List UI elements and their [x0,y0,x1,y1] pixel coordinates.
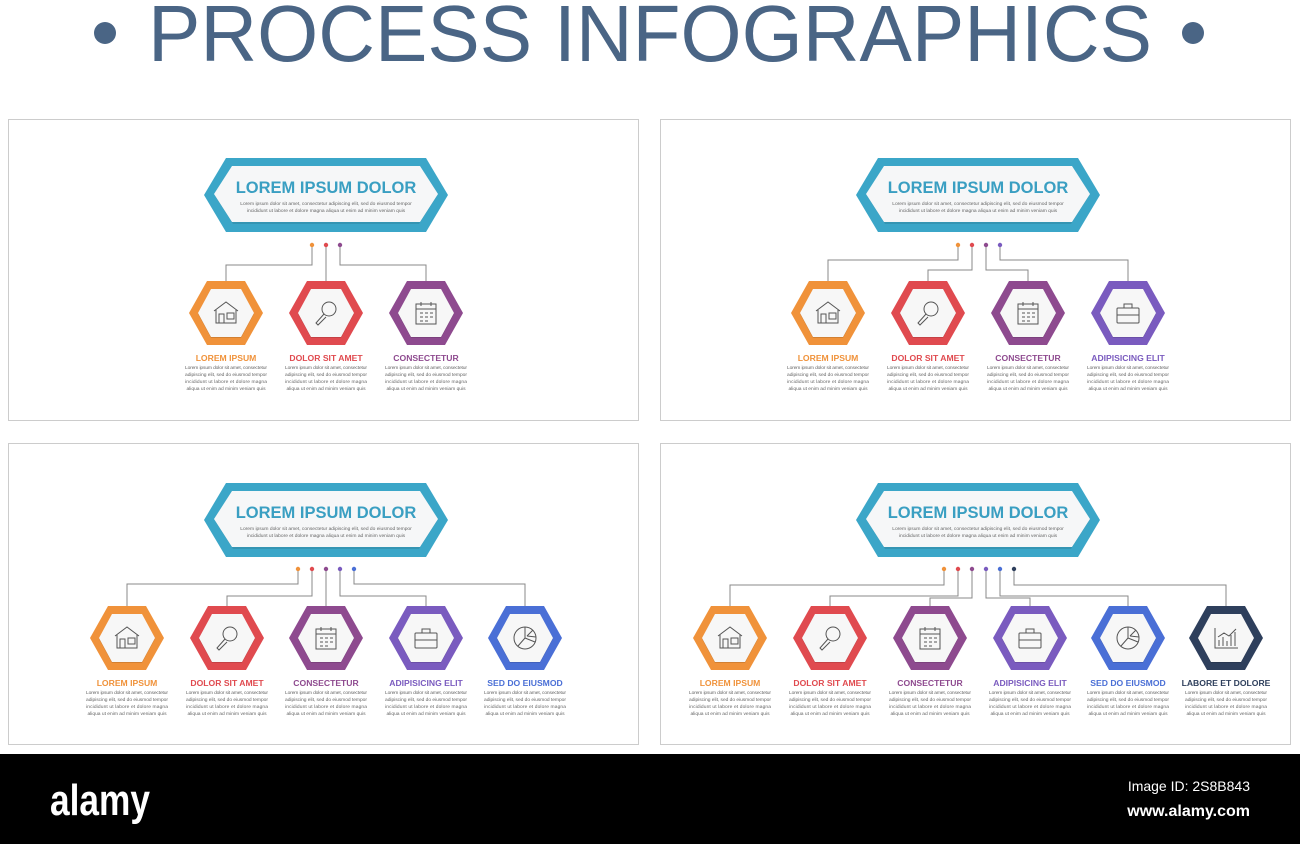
item: dolor sit amet: DOLOR SIT AMET [891,353,965,363]
item: adipisicing elit: Lorem ipsum dolor sit amet, consectetur [989,690,1071,696]
item: consectetur: aliqua ut enim ad minim veniam quis [386,386,466,392]
item: lorem ipsum: LOREM IPSUM [196,353,256,363]
image id: Image ID: 2S8B843 [1128,778,1250,794]
item: consectetur: incididunt ut labore et dolore magna [285,704,367,710]
item: dolor sit amet [789,606,871,717]
item: lorem ipsum: aliqua ut enim ad minim veniam quis [690,711,770,717]
item: dolor sit amet: incididunt ut labore et dolore magna [789,704,871,710]
item: dolor sit amet: aliqua ut enim ad minim veniam quis [790,711,870,717]
item: lorem ipsum: incididunt ut labore et dolore magna [86,704,168,710]
item: lorem ipsum: LOREM IPSUM [97,678,157,688]
item: consectetur: adipiscing elit, sed do eiusmod tempor [285,697,367,703]
header [856,483,1100,557]
item: consectetur: adipiscing elit, sed do eiusmod tempor [889,697,971,703]
item: sed do eiusmod: adipiscing elit, sed do eiusmod tempor [1087,697,1169,703]
item: lorem ipsum: Lorem ipsum dolor sit amet, consectetur [86,690,168,696]
header: LOREM IPSUM DOLOR [888,504,1068,522]
connectors [730,567,1226,606]
item: consectetur: CONSECTETUR [393,353,459,363]
connectors [828,243,1128,281]
item: consectetur: aliqua ut enim ad minim veniam quis [988,386,1068,392]
item: lorem ipsum: adipiscing elit, sed do eiusmod tempor [689,697,771,703]
item: lorem ipsum: adipiscing elit, sed do eiusmod tempor [86,697,168,703]
item: adipisicing elit: incididunt ut labore et dolore magna [989,704,1071,710]
item: sed do eiusmod: adipiscing elit, sed do eiusmod tempor [484,697,566,703]
item: sed do eiusmod [1087,606,1169,717]
item: labore et dolore: LABORE ET DOLORE [1182,678,1271,688]
item: dolor sit amet: incididunt ut labore et dolore magna [887,379,969,385]
item: dolor sit amet: aliqua ut enim ad minim veniam quis [888,386,968,392]
item: lorem ipsum: LOREM IPSUM [700,678,760,688]
item: dolor sit amet: Lorem ipsum dolor sit amet, consectetur [887,365,969,371]
item: sed do eiusmod: incididunt ut labore et dolore magna [1087,704,1169,710]
item: lorem ipsum: aliqua ut enim ad minim veniam quis [186,386,266,392]
item: consectetur [987,281,1069,392]
header: Lorem ipsum dolor sit amet, consectetur adipiscing elit, sed do eiusmod tempor [240,201,412,207]
item: labore et dolore: incididunt ut labore et dolore magna [1185,704,1267,710]
item: lorem ipsum [185,281,267,392]
item: consectetur: Lorem ipsum dolor sit amet, consectetur [285,690,367,696]
panel: four steps [660,120,1290,420]
item: labore et dolore: adipiscing elit, sed do eiusmod tempor [1185,697,1267,703]
item: adipisicing elit: adipiscing elit, sed do eiusmod tempor [989,697,1071,703]
item: lorem ipsum [689,606,771,717]
item: dolor sit amet: DOLOR SIT AMET [190,678,264,688]
item: sed do eiusmod: incididunt ut labore et dolore magna [484,704,566,710]
item: adipisicing elit: adipiscing elit, sed do eiusmod tempor [385,697,467,703]
header: LOREM IPSUM DOLOR [236,504,416,522]
header [204,483,448,557]
header: LOREM IPSUM DOLOR [236,179,416,197]
item: consectetur: aliqua ut enim ad minim veniam quis [890,711,970,717]
item: lorem ipsum: aliqua ut enim ad minim veniam quis [87,711,167,717]
item: dolor sit amet: Lorem ipsum dolor sit amet, consectetur [789,690,871,696]
item: sed do eiusmod: aliqua ut enim ad minim veniam quis [485,711,565,717]
header: incididunt ut labore et dolore magna aliqua ut enim ad minim veniam quis [247,208,406,214]
item: labore et dolore: Lorem ipsum dolor sit amet, consectetur [1185,690,1267,696]
item: consectetur: adipiscing elit, sed do eiusmod tempor [385,372,467,378]
item: consectetur: CONSECTETUR [897,678,963,688]
header: incididunt ut labore et dolore magna aliqua ut enim ad minim veniam quis [899,533,1058,539]
item: dolor sit amet: adipiscing elit, sed do eiusmod tempor [887,372,969,378]
panel: three steps [8,120,638,420]
header: Lorem ipsum dolor sit amet, consectetur adipiscing elit, sed do eiusmod tempor [892,201,1064,207]
item: labore et dolore: aliqua ut enim ad minim veniam quis [1186,711,1266,717]
item: sed do eiusmod: SED DO EIUSMOD [1090,678,1166,688]
item: dolor sit amet: Lorem ipsum dolor sit amet, consectetur [285,365,367,371]
item: dolor sit amet: Lorem ipsum dolor sit amet, consectetur [186,690,268,696]
item: consectetur: incididunt ut labore et dolore magna [385,379,467,385]
header [856,158,1100,232]
item: consectetur: incididunt ut labore et dolore magna [987,379,1069,385]
item: sed do eiusmod: Lorem ipsum dolor sit amet, consectetur [484,690,566,696]
url: www.alamy.com [1126,803,1250,820]
item: dolor sit amet: incididunt ut labore et dolore magna [285,379,367,385]
item: consectetur: adipiscing elit, sed do eiusmod tempor [987,372,1069,378]
item: dolor sit amet: aliqua ut enim ad minim veniam quis [187,711,267,717]
connectors [127,567,525,606]
item: consectetur: Lorem ipsum dolor sit amet, consectetur [987,365,1069,371]
item: lorem ipsum [787,281,869,392]
item: lorem ipsum: aliqua ut enim ad minim veniam quis [788,386,868,392]
item: adipisicing elit [989,606,1071,717]
item: adipisicing elit: aliqua ut enim ad minim veniam quis [1088,386,1168,392]
item: sed do eiusmod [484,606,566,717]
item: consectetur [385,281,467,392]
item: lorem ipsum: LOREM IPSUM [798,353,858,363]
item: adipisicing elit: ADIPISICING ELIT [389,678,464,688]
item: lorem ipsum: Lorem ipsum dolor sit amet, consectetur [689,690,771,696]
connectors [226,243,426,281]
item: lorem ipsum: Lorem ipsum dolor sit amet, consectetur [185,365,267,371]
item: sed do eiusmod: aliqua ut enim ad minim veniam quis [1088,711,1168,717]
item: consectetur [889,606,971,717]
item: adipisicing elit [385,606,467,717]
item: consectetur: aliqua ut enim ad minim veniam quis [286,711,366,717]
item: adipisicing elit: incididunt ut labore et dolore magna [385,704,467,710]
item: lorem ipsum: Lorem ipsum dolor sit amet, consectetur [787,365,869,371]
item: dolor sit amet [887,281,969,392]
header: Lorem ipsum dolor sit amet, consectetur adipiscing elit, sed do eiusmod tempor [240,526,412,532]
item: consectetur [285,606,367,717]
header: Lorem ipsum dolor sit amet, consectetur adipiscing elit, sed do eiusmod tempor [892,526,1064,532]
item: adipisicing elit: aliqua ut enim ad minim veniam quis [990,711,1070,717]
item: dolor sit amet [285,281,367,392]
panel: five steps [8,444,638,744]
item: lorem ipsum: incididunt ut labore et dolore magna [185,379,267,385]
item: dolor sit amet: adipiscing elit, sed do eiusmod tempor [285,372,367,378]
item: dolor sit amet: aliqua ut enim ad minim veniam quis [286,386,366,392]
item: dolor sit amet [186,606,268,717]
item: dolor sit amet: adipiscing elit, sed do eiusmod tempor [186,697,268,703]
item: consectetur: Lorem ipsum dolor sit amet, consectetur [385,365,467,371]
item: labore et dolore [1182,606,1271,717]
item: adipisicing elit [1087,281,1169,392]
item: dolor sit amet: incididunt ut labore et dolore magna [186,704,268,710]
header: incididunt ut labore et dolore magna aliqua ut enim ad minim veniam quis [247,533,406,539]
item: adipisicing elit: incididunt ut labore et dolore magna [1087,379,1169,385]
item: adipisicing elit: ADIPISICING ELIT [993,678,1068,688]
item: consectetur: Lorem ipsum dolor sit amet, consectetur [889,690,971,696]
item: sed do eiusmod: Lorem ipsum dolor sit amet, consectetur [1087,690,1169,696]
item: consectetur: CONSECTETUR [293,678,359,688]
item: lorem ipsum: incididunt ut labore et dolore magna [787,379,869,385]
logo: alamy [50,776,150,825]
item: lorem ipsum: adipiscing elit, sed do eiusmod tempor [185,372,267,378]
item: adipisicing elit: ADIPISICING ELIT [1091,353,1166,363]
footer bar [0,754,1300,844]
item: dolor sit amet: DOLOR SIT AMET [289,353,363,363]
panel: six steps [660,444,1290,744]
item: adipisicing elit: Lorem ipsum dolor sit amet, consectetur [385,690,467,696]
item: consectetur: CONSECTETUR [995,353,1061,363]
item: lorem ipsum: adipiscing elit, sed do eiusmod tempor [787,372,869,378]
item: consectetur: incididunt ut labore et dolore magna [889,704,971,710]
header: LOREM IPSUM DOLOR [888,179,1068,197]
item: dolor sit amet: adipiscing elit, sed do eiusmod tempor [789,697,871,703]
item: dolor sit amet: DOLOR SIT AMET [793,678,867,688]
header: incididunt ut labore et dolore magna aliqua ut enim ad minim veniam quis [899,208,1058,214]
item: adipisicing elit: aliqua ut enim ad minim veniam quis [386,711,466,717]
item: adipisicing elit: adipiscing elit, sed do eiusmod tempor [1087,372,1169,378]
item: lorem ipsum: incididunt ut labore et dolore magna [689,704,771,710]
item: lorem ipsum [86,606,168,717]
header [204,158,448,232]
item: adipisicing elit: Lorem ipsum dolor sit amet, consectetur [1087,365,1169,371]
item: sed do eiusmod: SED DO EIUSMOD [487,678,563,688]
